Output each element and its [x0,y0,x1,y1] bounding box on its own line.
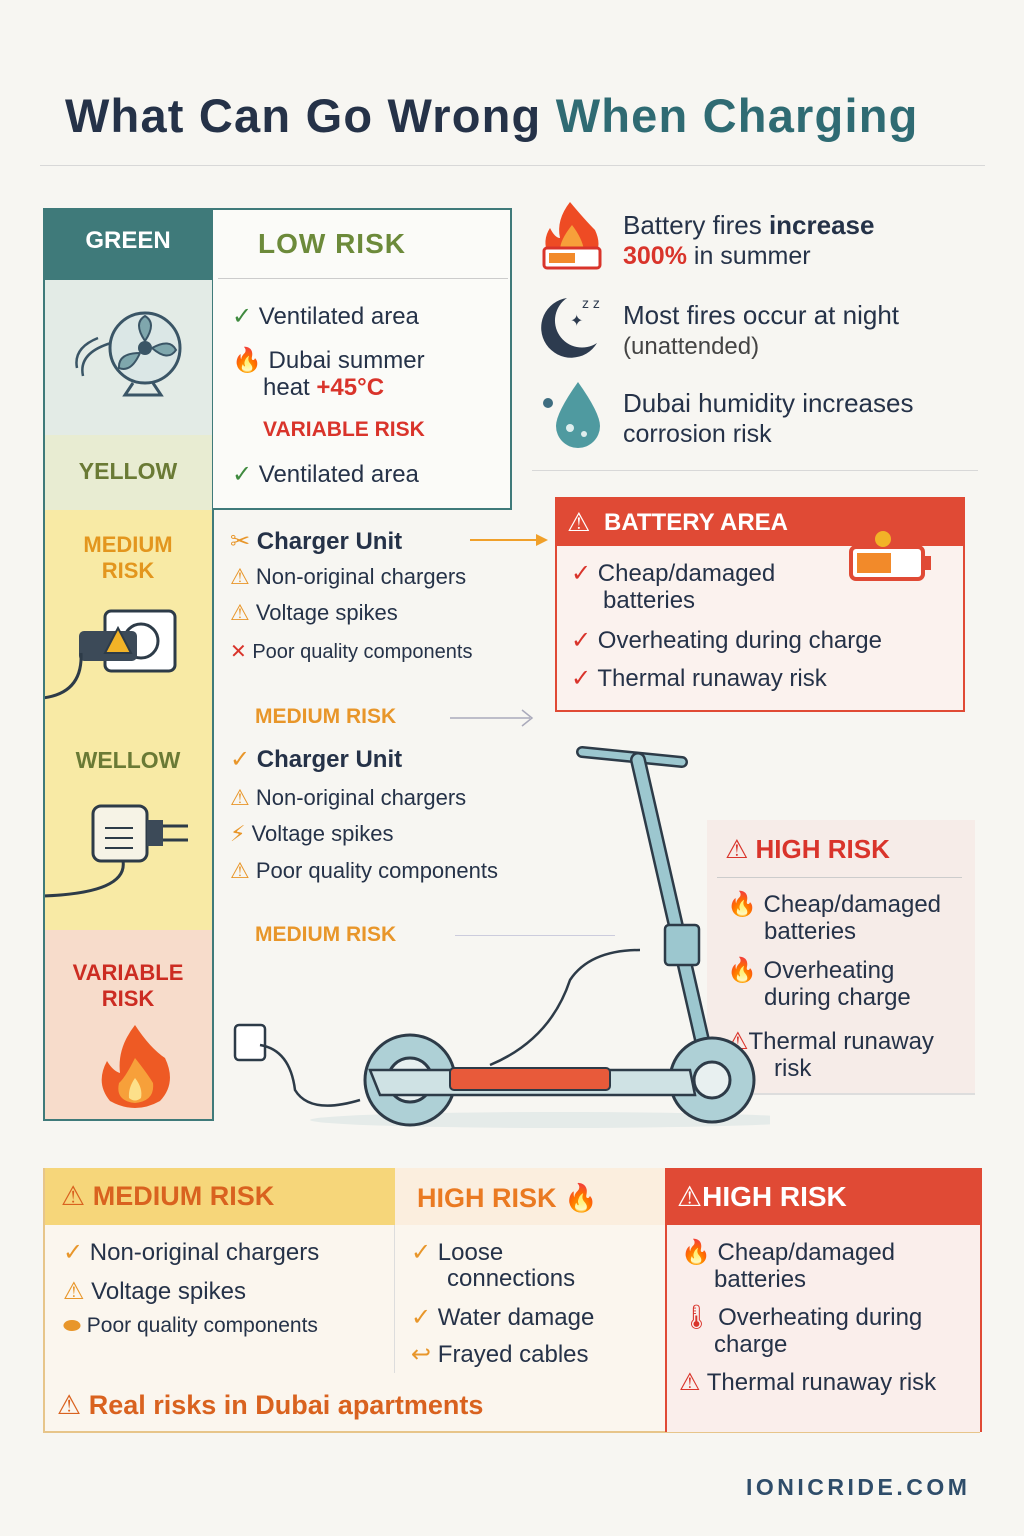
icon: plug adapter [45,804,188,898]
left column cells: GREEN [85,227,171,254]
text block: charger unit [230,528,472,663]
panel: battery area: ⚠ [567,507,590,537]
text block: charger unit: ⚠ Voltage spikes [230,600,398,625]
panel: left risk table: LOW RISK [258,228,406,259]
text block: charger unit 2 [230,746,498,883]
arrow [470,534,548,546]
panel: battery area: BATTERY AREA [604,509,788,536]
panel: left risk table: RISK [102,558,154,583]
footer note: ⚠ Real risks in Dubai apartments [57,1390,483,1420]
panel: left risk table: YELLOW [79,458,177,484]
panel: high risk callout: ⚠ HIGH RISK [725,834,890,864]
right column top cell [213,208,512,510]
panel: bottom risk summary: ⚠HIGH RISK [677,1181,847,1212]
stats: humidity: corrosion risk [623,420,772,448]
text block: low risk items [232,303,425,488]
panel: high risk callout: risk [774,1055,811,1082]
panel: high risk callout: during charge [764,984,911,1011]
panel: bottom risk summary: connections [447,1265,575,1292]
stats: battery fires: Battery fires increase [623,210,874,240]
column: medium risk [45,1168,395,1225]
icon: charger outlet [45,610,176,700]
panel: bottom risk summary: 🔥 Cheap/damaged [681,1239,895,1266]
panel: high risk callout [707,820,975,1095]
title: What Can Go Wrong When Charging [65,89,919,142]
heading: medium risk 2: MEDIUM RISK [255,923,396,946]
illustration: scooter charging [234,746,770,1128]
panel: bottom risk summary: ✓ Loose [411,1239,503,1266]
panel: left risk table: RISK [102,986,154,1011]
panel: bottom risk summary: ✓ Water damage [411,1304,594,1331]
panel: battery area: ✓ Thermal runaway risk [571,665,827,692]
icon: battery [849,531,931,581]
text block: low risk items: ✓ Ventilated area [232,303,419,330]
text block: charger unit 2: ⚠ Poor quality components [230,858,498,883]
panel: bottom risk summary: ⬬ Poor quality components [63,1314,318,1337]
text block: charger unit: ⚠ Non-original chargers [230,564,466,589]
panel: bottom risk summary [43,1168,980,1433]
column: high risk red [665,1168,982,1432]
left column cells [43,208,213,280]
panel: bottom risk summary: ⚠ Thermal runaway risk [679,1369,936,1396]
stats: night: Most fires occur at night [623,300,899,330]
icon: fan [75,312,182,396]
column: medium risk: ⚠ MEDIUM RISK [61,1181,274,1211]
panel: battery area: ✓ Cheap/damaged [571,560,775,587]
text block: charger unit: ✕ Poor quality components [230,641,472,663]
column: high risk [395,1168,665,1225]
text block: charger unit 2: ⚠ Non-original chargers [230,785,466,810]
stats: humidity [543,382,913,448]
panel: bottom risk summary: 🌡 Overheating during [681,1304,922,1331]
text block: charger unit: ✂ Charger Unit [230,528,402,555]
panel: bottom risk summary: charge [714,1331,787,1358]
text block: charger unit 2: ⚡ Voltage spikes [230,821,393,846]
stats: battery fires: 300% in summer [623,242,811,270]
icon: fire [102,1025,170,1108]
brand footer: IONICRIDE.COM [746,1474,970,1500]
text block: low risk items: ✓ Ventilated area [232,461,419,488]
panel: bottom risk summary: ✓ Non-original chargers [63,1239,319,1266]
text block: low risk items: 🔥 Dubai summer [232,347,425,374]
panel: left risk table [43,208,512,1121]
panel: battery area: ✓ Overheating during charge [571,627,882,654]
panel: battery area [555,497,965,712]
stats: night: z z [582,295,600,311]
panel: left risk table: WELLOW [76,747,180,773]
panel: bottom risk summary: batteries [714,1266,806,1293]
stats: night: ✦ [570,313,583,330]
text block: low risk items: heat +45°C [263,374,384,401]
panel: left risk table: MEDIUM [83,532,173,557]
stats: battery fires [542,202,874,270]
text block: low risk items: VARIABLE RISK [263,418,425,441]
panel: bottom risk summary: ⚠ Voltage spikes [63,1278,246,1305]
heading: medium risk [255,705,533,728]
column: high risk: HIGH RISK 🔥 [417,1183,598,1213]
stats: humidity: Dubai humidity increases [623,388,913,418]
panel: high risk callout: ⚠Thermal runaway [727,1028,934,1055]
heading: medium risk: MEDIUM RISK [255,705,396,728]
text block: charger unit 2: ✓ Charger Unit [230,746,402,773]
panel: high risk callout: 🔥 Cheap/damaged [727,891,941,918]
stats: night: (unattended) [623,333,759,360]
panel: high risk callout: batteries [764,918,856,945]
panel: high risk callout: 🔥 Overheating [727,957,894,984]
panel: battery area: batteries [603,587,695,614]
panel: left risk table: VARIABLE [73,960,183,985]
stats: night [541,295,899,360]
panel: bottom risk summary: ↩ Frayed cables [411,1341,589,1368]
